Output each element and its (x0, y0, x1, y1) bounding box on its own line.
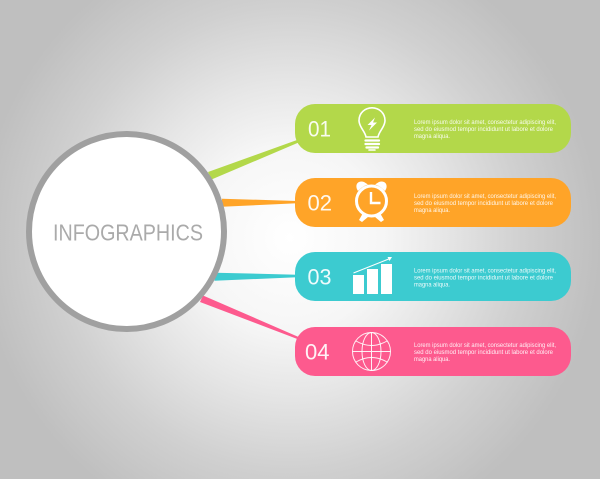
circle title: INFOGRAPHICS (53, 220, 203, 246)
description 02: magna aliqua. (414, 207, 450, 214)
description 04: magna aliqua. (414, 356, 450, 363)
central circle (29, 134, 224, 329)
number 02: 02 (308, 191, 332, 216)
description 02: Lorem ipsum dolor sit amet, consectetur adipiscing elit, (414, 193, 556, 200)
description 04: sed do eiusmod tempor incididunt ut labore et dolore (414, 349, 554, 356)
connector: orange (222, 199, 297, 207)
description 02: sed do eiusmod tempor incididunt ut labore et dolore (414, 200, 554, 207)
panel: 04 (295, 327, 571, 376)
description 02 (414, 193, 556, 214)
description 01: magna aliqua. (414, 133, 450, 140)
icon: globe (352, 332, 390, 370)
icon: bar chart with arrow (353, 257, 392, 294)
description 03: sed do eiusmod tempor incididunt ut labore et dolore (414, 274, 554, 282)
connector: pink (200, 296, 298, 339)
icon: alarm clock (356, 182, 387, 222)
description 04 (414, 342, 556, 363)
connector: teal (214, 273, 297, 281)
description 03: magna aliqua. (414, 282, 450, 288)
description 01: sed do eiusmod tempor incididunt ut labore et dolore (414, 126, 554, 133)
icon: light bulb (359, 108, 385, 150)
description 03: Lorem ipsum dolor sit amet, consectetur adipiscing elit, (414, 268, 556, 274)
connector: green (208, 140, 298, 180)
description 03 (414, 268, 556, 288)
panel: 01 (295, 104, 571, 153)
panel: 03 (295, 252, 571, 301)
description 04: Lorem ipsum dolor sit amet, consectetur adipiscing elit, (414, 342, 556, 349)
number 04: 04 (305, 339, 330, 364)
panel: 02 (295, 178, 571, 227)
number 01: 01 (308, 117, 331, 142)
description 01 (414, 119, 556, 140)
number 03: 03 (308, 264, 332, 289)
description 01: Lorem ipsum dolor sit amet, consectetur adipiscing elit, (414, 119, 556, 126)
